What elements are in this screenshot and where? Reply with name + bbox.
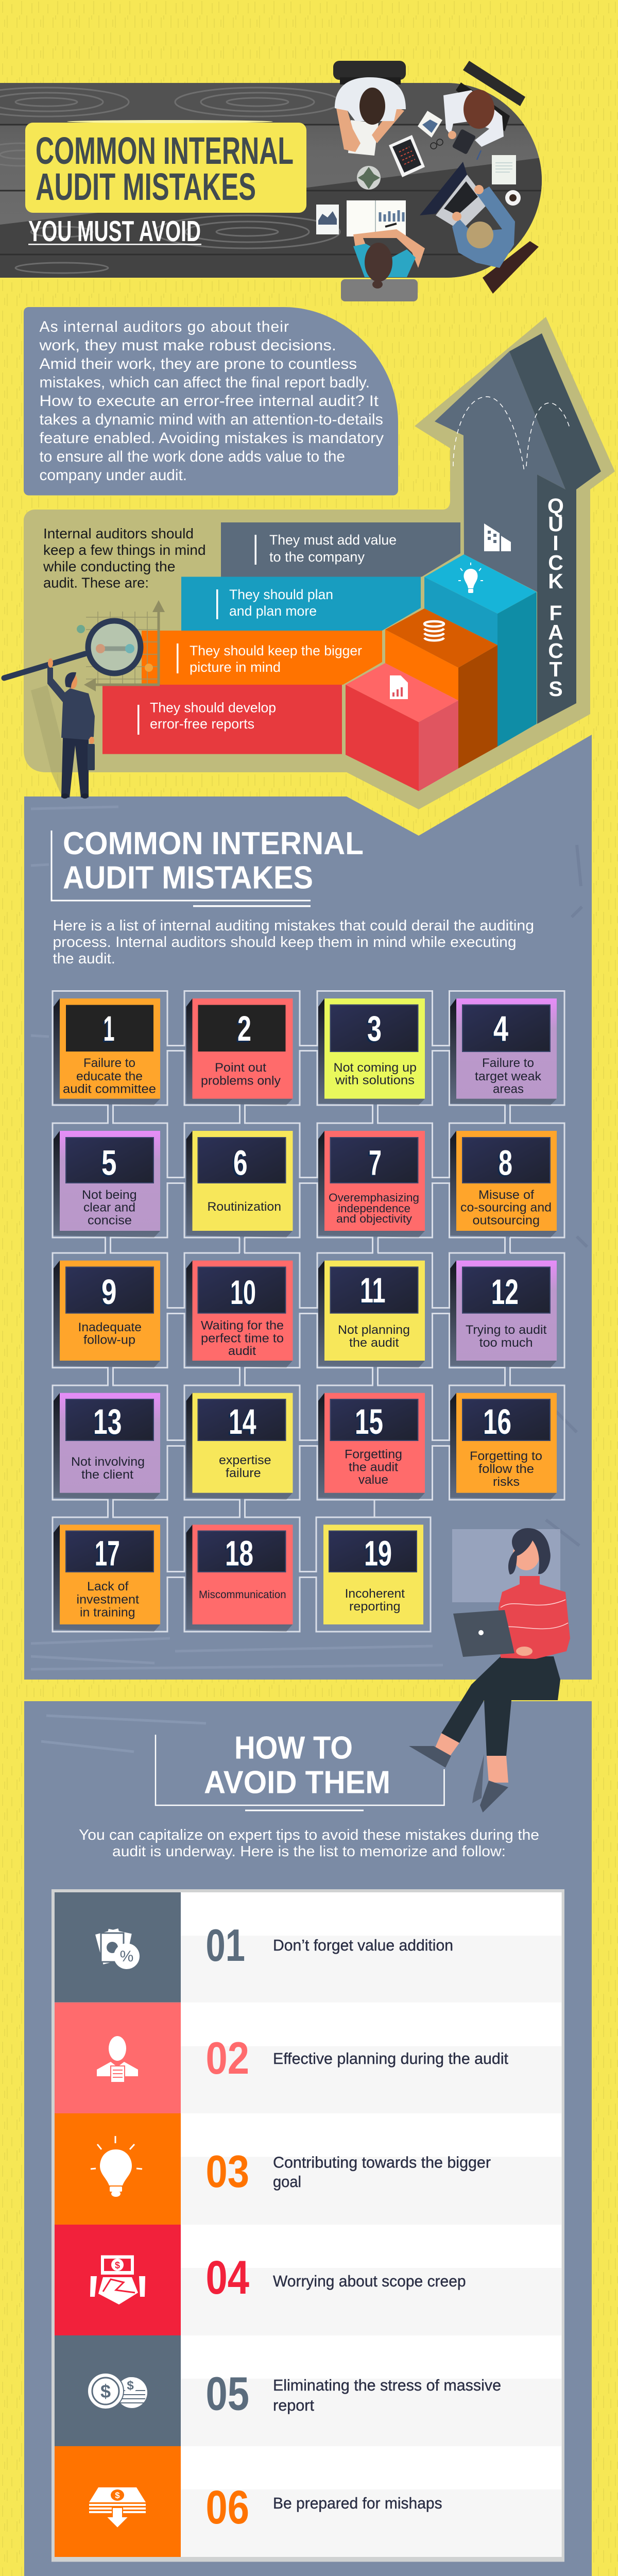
mistakes section intro: the audit. <box>53 951 115 967</box>
intro to quick facts text: keep a few things in mind <box>43 542 206 558</box>
card 7: and objectivity <box>336 1212 412 1225</box>
card 10: 10 <box>230 1273 256 1311</box>
card 13: the client <box>81 1468 133 1482</box>
quick facts staircase arrow <box>4 317 615 809</box>
card 10: Waiting for the <box>201 1319 284 1333</box>
tip 02: 02 <box>206 2032 249 2083</box>
card 13 <box>54 1393 160 1500</box>
title plate <box>25 120 306 213</box>
card 7: independence <box>338 1202 410 1215</box>
card 2: 2 <box>237 1009 251 1048</box>
card 7: 7 <box>369 1143 382 1183</box>
card 18: 18 <box>225 1533 253 1573</box>
card 12 <box>450 1261 557 1368</box>
olive backing shape <box>24 317 615 809</box>
illustration: businessman <box>31 658 95 799</box>
card 9: follow-up <box>83 1333 135 1347</box>
tip 05: 05 <box>206 2368 249 2420</box>
tip 02 <box>55 2003 562 2113</box>
card 15: Forgetting <box>345 1448 402 1462</box>
card 9 <box>54 1261 160 1368</box>
step: plan and plan more: and plan more <box>229 603 317 619</box>
laptop and person with plaid shirt <box>420 162 539 294</box>
chart behind magnifier <box>77 600 165 691</box>
card 17 <box>54 1524 160 1632</box>
card 5: clear and <box>83 1201 135 1215</box>
panel: common internal audit mistakes background <box>24 735 592 1680</box>
card 15: value <box>358 1473 388 1487</box>
card 11: 11 <box>360 1270 385 1310</box>
tip 06: 06 <box>206 2481 249 2534</box>
tip 05: Eliminating the stress of massive <box>273 2376 501 2394</box>
how to avoid heading: HOW TO <box>234 1730 353 1766</box>
subtitle: YOU MUST AVOID <box>28 215 201 248</box>
card 10: audit <box>228 1344 256 1358</box>
card 16 <box>450 1393 557 1500</box>
card 8 <box>450 1131 557 1238</box>
cube: orange with database icon <box>385 608 497 769</box>
card 11: the audit <box>349 1336 399 1350</box>
intro text panel: mistakes, which can affect the final report badly. <box>39 374 370 391</box>
card 1: Failure to <box>83 1056 135 1070</box>
intro text panel: feature enabled. Avoiding mistakes is mandatory <box>39 430 384 447</box>
card 6 <box>186 1131 293 1238</box>
card 14: 14 <box>229 1402 256 1442</box>
tip 04: Worrying about scope creep <box>273 2272 466 2290</box>
card 6: Routinization <box>207 1200 281 1214</box>
quick facts label: T <box>549 657 562 681</box>
card 17: in training <box>80 1605 135 1619</box>
mistakes section heading: COMMON INTERNAL <box>63 826 364 861</box>
card 16: Forgetting to <box>470 1449 542 1463</box>
card 3: 3 <box>367 1009 382 1048</box>
mistakes section intro <box>53 918 534 967</box>
card 19: reporting <box>349 1600 401 1614</box>
card 7 <box>318 1131 425 1238</box>
step: error-free reports: They should develop <box>150 700 276 715</box>
card 8: co-sourcing and <box>460 1201 552 1215</box>
card 12: too much <box>479 1336 533 1350</box>
person top right with red hair <box>443 61 525 155</box>
intro to quick facts text: Internal auditors should <box>43 526 194 541</box>
mistakes section intro: Here is a list of internal auditing mistakes that could derail the auditing <box>53 918 534 934</box>
card 14: expertise <box>219 1453 271 1467</box>
cube: blue with bulb icon <box>424 554 537 747</box>
intro to quick facts text <box>43 526 205 591</box>
quick facts label: Q <box>547 494 564 518</box>
quick facts label: K <box>548 569 563 593</box>
step: they must add value: They must add value <box>269 532 397 548</box>
tip 04: $ <box>115 2260 120 2270</box>
card 4 <box>450 998 557 1105</box>
card 19: 19 <box>364 1533 392 1573</box>
step: error-free reports <box>102 685 342 754</box>
card 16: 16 <box>483 1402 511 1442</box>
icon: building on slate column <box>484 523 511 551</box>
card 16: risks <box>493 1475 520 1489</box>
card frames and connectors <box>53 991 564 1632</box>
card 17: 17 <box>95 1533 120 1573</box>
card 2: Point out <box>215 1061 266 1075</box>
card 3: with solutions <box>335 1074 415 1088</box>
tip 05: report <box>273 2396 314 2414</box>
quick facts label: C <box>548 639 563 663</box>
intro to quick facts text: while conducting the <box>43 558 175 574</box>
illustration: woman with laptop <box>409 1528 570 1812</box>
quick facts label: I <box>553 531 559 555</box>
step: they must add value: to the company <box>269 549 365 565</box>
card 17: investment <box>76 1593 139 1606</box>
panel: how to avoid them background <box>24 1701 592 2576</box>
card 13: Not involving <box>71 1455 145 1469</box>
tip 03: Contributing towards the bigger <box>273 2154 491 2171</box>
intro text panel: takes a dynamic mind with an attention-to-details <box>39 411 383 428</box>
intro text panel: As internal auditors go about their <box>39 318 289 335</box>
mistakes section heading <box>52 826 364 907</box>
card 13: 13 <box>93 1402 122 1442</box>
card 2: problems only <box>201 1074 281 1088</box>
step: they must add value <box>221 522 460 577</box>
mistakes section intro: process. Internal auditors should keep them in mind while executing <box>53 934 517 951</box>
card 9: Inadequate <box>78 1320 142 1334</box>
card 8: 8 <box>499 1143 512 1183</box>
how to avoid intro <box>79 1827 539 1860</box>
quick facts label: F <box>549 601 562 625</box>
card 1: 1 <box>103 1009 114 1048</box>
card 15: the audit <box>349 1460 398 1475</box>
tip 03: 03 <box>206 2146 249 2197</box>
intro text panel <box>24 307 398 496</box>
tip 02: Effective planning during the audit <box>273 2049 508 2067</box>
tip 04: 04 <box>206 2251 249 2304</box>
card 19: Incoherent <box>345 1587 405 1601</box>
card 10: perfect time to <box>201 1331 284 1346</box>
card 14 <box>186 1393 293 1500</box>
how to avoid heading: AVOID THEM <box>204 1765 390 1800</box>
title plate: COMMON INTERNAL <box>36 129 294 172</box>
card 3: Not coming up <box>334 1061 417 1075</box>
tip 01: Don’t forget value addition <box>273 1936 453 1954</box>
table top <box>0 83 546 281</box>
card 2 <box>186 998 293 1105</box>
how to avoid intro: You can capitalize on expert tips to avoid these mistakes during the <box>79 1827 539 1843</box>
person top with white shirt <box>333 61 406 156</box>
card 4: areas <box>493 1082 524 1096</box>
intro text panel: to ensure all the work done adds value to the <box>39 448 345 465</box>
tip 05: $ <box>127 2379 134 2393</box>
tip 03: goal <box>273 2173 301 2191</box>
tip 01 <box>55 1892 562 2003</box>
quick facts label: S <box>548 677 563 701</box>
card 6: 6 <box>233 1143 248 1183</box>
card 1 <box>54 998 160 1105</box>
card 12: 12 <box>491 1272 519 1312</box>
card 5: 5 <box>101 1143 116 1183</box>
tip 05: $ <box>100 2381 111 2402</box>
card 12: Trying to audit <box>466 1323 547 1337</box>
icon: magnifying glass <box>4 621 141 678</box>
card 4: target weak <box>475 1070 542 1083</box>
step: keep the bigger picture <box>142 631 382 685</box>
card 1: educate the <box>76 1070 143 1083</box>
step: plan and plan more <box>181 577 421 631</box>
card 15: 15 <box>355 1402 383 1442</box>
arrow body <box>435 333 601 724</box>
card 4: Failure to <box>482 1056 534 1070</box>
tip 06 <box>55 2446 562 2557</box>
card 1: audit committee <box>63 1082 156 1096</box>
tips list <box>52 1889 564 2562</box>
tip 06: Be prepared for mishaps <box>273 2494 442 2512</box>
card 14: failure <box>226 1466 261 1480</box>
quick facts label: U <box>548 512 563 536</box>
card 16: follow the <box>478 1462 534 1476</box>
card 19 <box>323 1524 423 1624</box>
card 9: 9 <box>101 1272 116 1312</box>
step: error-free reports: error-free reports <box>150 716 254 732</box>
intro text panel: Amid their work, they are prone to countless <box>39 355 357 372</box>
card 4: 4 <box>493 1009 508 1048</box>
step: keep the bigger picture: picture in mind <box>190 659 281 675</box>
quick facts label: A <box>548 620 563 644</box>
card 8: outsourcing <box>473 1214 540 1227</box>
intro text panel: work, they must make robust decisions. <box>39 337 336 354</box>
card 18: Miscommunication <box>199 1589 286 1601</box>
person bottom with teal shirt <box>341 224 425 301</box>
tip 06: $ <box>115 2490 120 2500</box>
tip 01: % <box>120 1948 133 1965</box>
illustration: people working at table <box>316 61 539 301</box>
tip 05 <box>55 2335 562 2446</box>
card 3 <box>318 998 425 1105</box>
card 5: Not being <box>82 1188 137 1202</box>
tip 04 <box>55 2225 562 2335</box>
card 18 <box>186 1524 293 1632</box>
card 17: Lack of <box>87 1580 129 1594</box>
intro to quick facts text: audit. These are: <box>43 575 149 591</box>
card 7: Overemphasizing <box>329 1191 419 1204</box>
how to avoid heading <box>156 1730 444 1811</box>
cube: red with report icon <box>346 663 458 791</box>
card 11 <box>318 1261 425 1368</box>
card 5 <box>54 1131 160 1238</box>
card 10 <box>186 1261 293 1368</box>
card 5: concise <box>88 1214 132 1227</box>
documents and devices on table <box>316 111 521 236</box>
step: keep the bigger picture: They should keep the bigger <box>190 643 362 658</box>
step: plan and plan more: They should plan <box>229 587 333 602</box>
card 8: Misuse of <box>478 1188 534 1202</box>
quick facts label: C <box>548 551 563 574</box>
card 11: Not planning <box>338 1323 410 1337</box>
intro text panel: company under audit. <box>39 467 187 484</box>
tip 01: 01 <box>206 1920 245 1971</box>
title plate: AUDIT MISTAKES <box>36 165 256 208</box>
tip 03 <box>55 2113 562 2225</box>
intro text panel: How to execute an error-free internal audit? It <box>39 393 379 410</box>
how to avoid intro: audit is underway. Here is the list to memorize and follow: <box>112 1843 506 1860</box>
card 15 <box>318 1393 425 1500</box>
mistakes section heading: AUDIT MISTAKES <box>63 860 313 895</box>
